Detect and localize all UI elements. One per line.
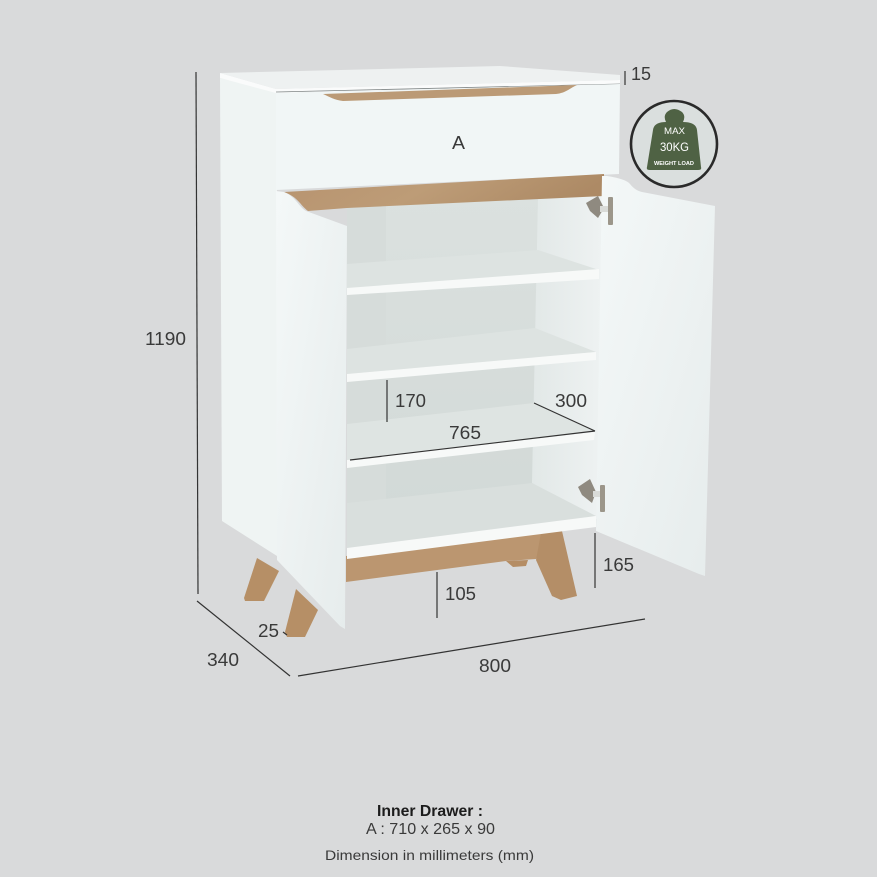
icon: weight silhouette: [647, 109, 701, 170]
depth line 340: [197, 601, 290, 676]
right door: [596, 176, 715, 576]
label A: A: [452, 133, 465, 153]
wooden base apron: [346, 528, 562, 582]
units note: Dimension in millimeters (mm): [325, 847, 534, 863]
label 105: 105: [445, 584, 476, 604]
door clearance line 165: [594, 533, 596, 588]
left side panel: [220, 78, 277, 556]
shelf 2: [347, 328, 596, 382]
inner drawer size: A : 710 x 265 x 90: [366, 821, 495, 838]
base clearance line 105: [436, 572, 438, 618]
leg tick 25: [283, 632, 287, 635]
icon: max weight load badge: [631, 101, 717, 187]
label 170: 170: [395, 391, 426, 411]
label 300: 300: [555, 391, 587, 411]
front right leg: [536, 531, 577, 600]
shelf width line 765: [350, 431, 595, 460]
width line 800: [298, 619, 645, 676]
bottom shelf: [347, 483, 596, 559]
front left leg: [285, 589, 318, 637]
top thickness tick 15: [624, 71, 626, 85]
small rear leg: [506, 560, 528, 567]
label 15: 15: [631, 64, 651, 84]
dimension labels: [145, 64, 651, 676]
drawer handle recess: [323, 85, 577, 101]
badge text: 30KG: 30KG: [660, 140, 689, 154]
shelf depth line 300: [534, 403, 595, 431]
shelf gap line 170: [386, 380, 388, 422]
shelf 3: [347, 403, 595, 468]
interior right side panel: [532, 195, 602, 520]
label 165: 165: [603, 555, 634, 575]
dimension lines: [196, 71, 645, 676]
label 1190: 1190: [145, 329, 186, 349]
bottom hinge: [578, 479, 605, 512]
wooden rail under drawer: [284, 174, 604, 211]
label 25: 25: [258, 621, 279, 641]
back panel centre joint: [347, 203, 386, 510]
badge text: WEIGHT LOAD: WEIGHT LOAD: [654, 161, 694, 167]
height line 1190: [196, 72, 198, 594]
top hinge: [586, 196, 613, 225]
cabinet top slab: [220, 66, 620, 93]
label 800: 800: [479, 656, 511, 676]
footer notes: [325, 803, 534, 863]
cabinet: [220, 66, 715, 637]
label 340: 340: [207, 650, 239, 670]
heading: inner drawer: Inner Drawer :: [377, 803, 483, 820]
interior back panel: [347, 195, 540, 510]
drawer front: [276, 84, 620, 190]
badge text: MAX: MAX: [664, 126, 685, 136]
shelf 1: [347, 250, 599, 295]
rear left leg: [244, 558, 279, 601]
left door: [276, 191, 347, 629]
label 765: 765: [449, 423, 481, 443]
